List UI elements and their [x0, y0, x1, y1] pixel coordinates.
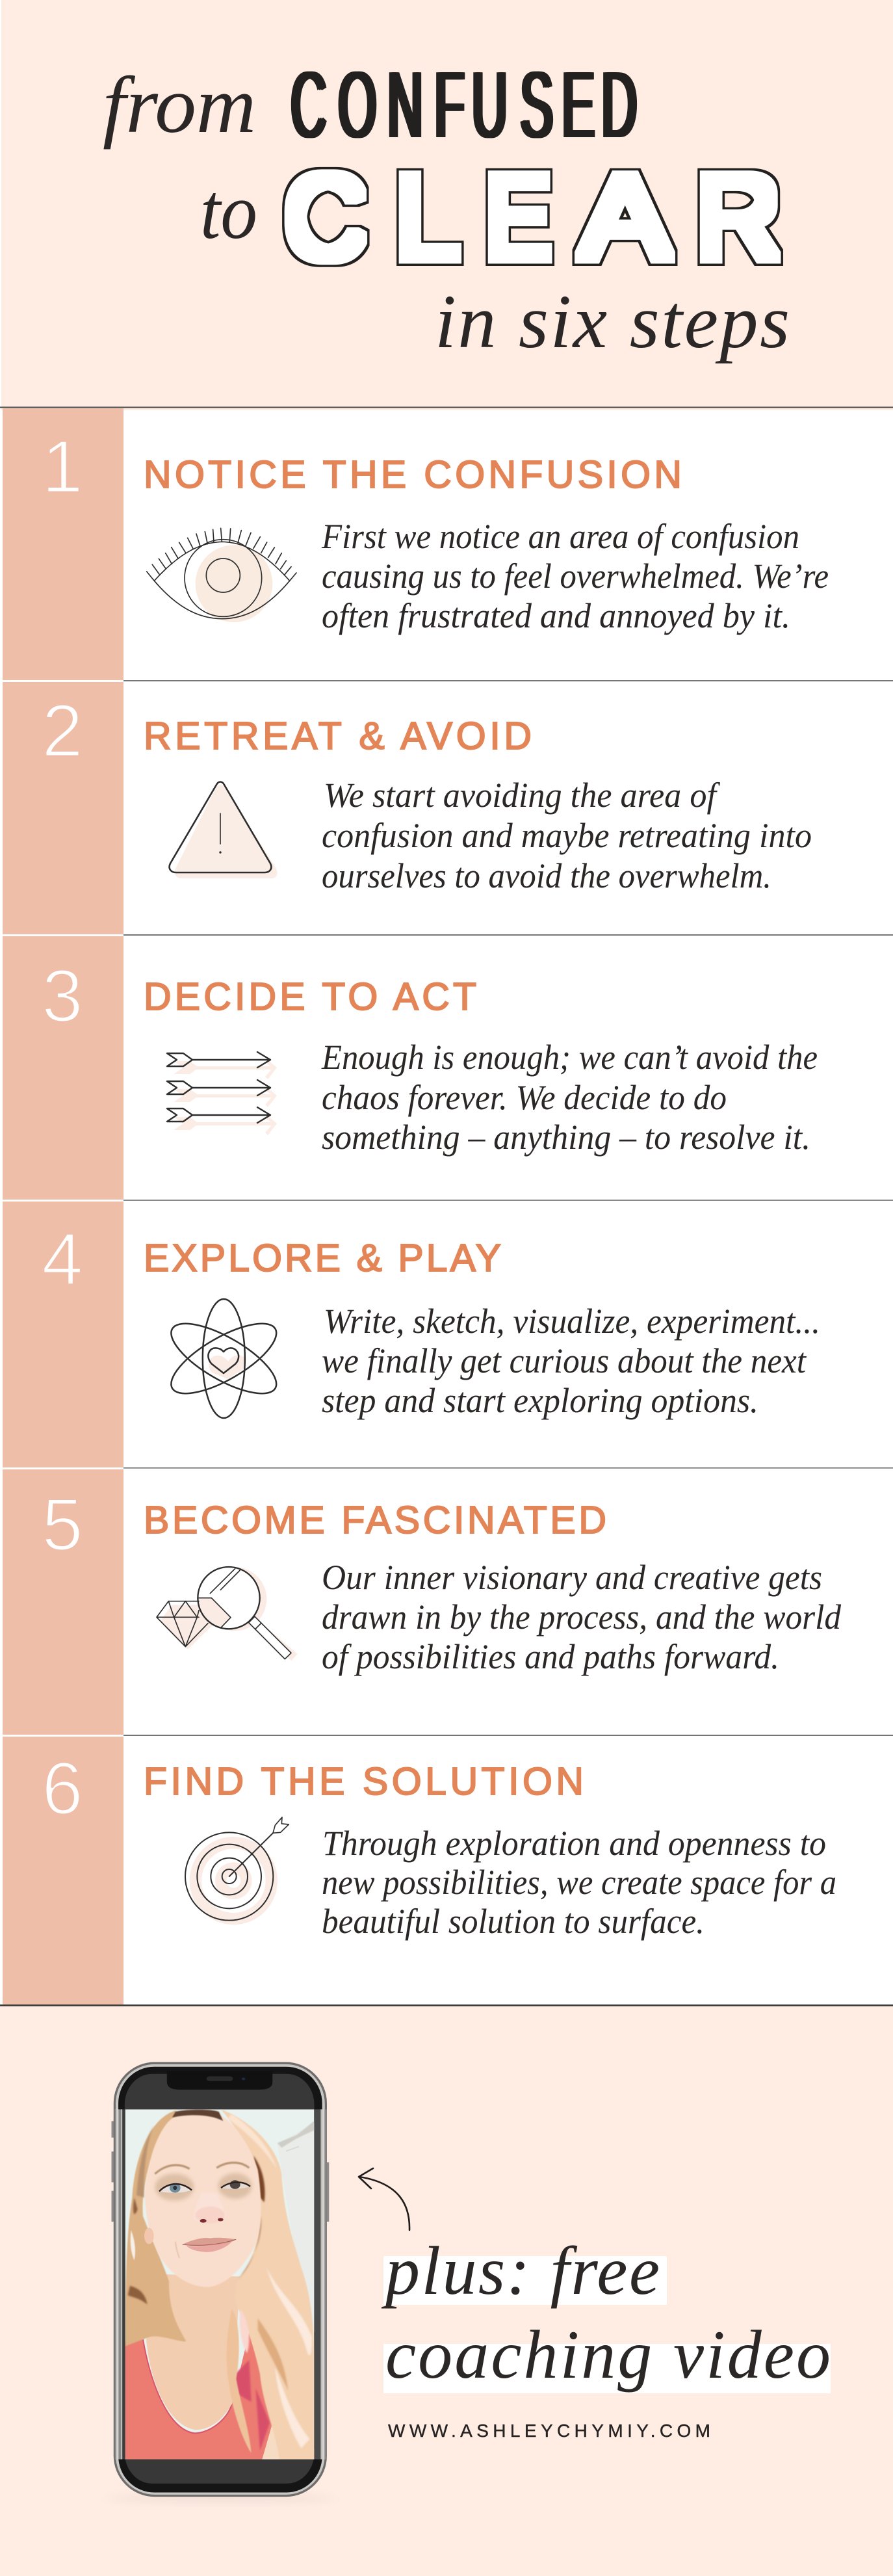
- step number 4: 4: [42, 1218, 83, 1301]
- icon: warning triangle: [170, 782, 278, 878]
- phone with photo: [105, 2062, 337, 2502]
- text block step 1: often frustrated and annoyed by it.: [322, 596, 790, 635]
- text block step 5: drawn in by the process, and the world: [322, 1597, 842, 1636]
- panel: step 1 notice the confusion: [3, 408, 829, 680]
- heading step 4: EXPLORE & PLAY: [144, 1237, 501, 1280]
- title word: CLEAR outlined: A: [580, 151, 670, 283]
- title line: in six steps: in six steps: [435, 279, 790, 364]
- callout: plus free coaching video: coaching video: [385, 2317, 831, 2393]
- title line: to: to: [200, 168, 257, 256]
- title word: CLEAR outlined: R: [696, 151, 781, 283]
- panel: title header: [1, 0, 893, 410]
- text block step 2: confusion and maybe retreating into: [322, 816, 812, 855]
- step number 6: 6: [42, 1748, 83, 1830]
- icon: target with arrow: [185, 1817, 289, 1925]
- text block step 1: causing us to feel overwhelmed. We’re: [322, 557, 829, 596]
- panel: step 5 become fascinated: [3, 1469, 842, 1735]
- text block step 2: ourselves to avoid the overwhelm.: [322, 856, 771, 895]
- text block step 6: beautiful solution to surface.: [322, 1902, 705, 1941]
- arrow: curved pointing to phone: [359, 2168, 409, 2230]
- phone body: [105, 2062, 337, 2502]
- title word: CLEAR outlined: E: [486, 151, 550, 283]
- step number 2: 2: [42, 690, 83, 772]
- title word: CONFUSED: N: [385, 52, 421, 157]
- step number 5: 5: [42, 1484, 83, 1566]
- text block step 5: of possibilities and paths forward.: [322, 1637, 779, 1676]
- text block step 4: Write, sketch, visualize, experiment...: [324, 1302, 820, 1341]
- title word: CLEAR outlined: [285, 151, 781, 283]
- icon: eye: [147, 528, 296, 622]
- step number 3: 3: [42, 955, 83, 1038]
- panel: step 3 decide to act: [3, 936, 818, 1200]
- title word: CLEAR outlined: C: [285, 151, 366, 283]
- title word: CLEAR outlined: L: [395, 151, 459, 283]
- panel: step 2 retreat and avoid: [3, 682, 812, 934]
- text block step 6: new possibilities, we create space for a: [322, 1863, 836, 1902]
- website url: WWW.ASHLEYCHYMIY.COM: [388, 2421, 710, 2441]
- text block step 3: something – anything – to resolve it.: [322, 1118, 810, 1157]
- heading step 6: FIND THE SOLUTION: [144, 1760, 584, 1803]
- panel: step 6 find the solution: [3, 1737, 836, 2004]
- step number 1: 1: [42, 426, 83, 508]
- title word: CONFUSED: D: [599, 52, 634, 157]
- title word: CONFUSED: S: [518, 52, 550, 157]
- icon: atom with heart: [162, 1299, 286, 1418]
- text block step 3: [321, 1038, 818, 1157]
- text block step 2: [322, 776, 812, 895]
- text block step 1: First we notice an area of confusion: [321, 517, 799, 556]
- text block step 5: [322, 1558, 842, 1676]
- text block step 2: We start avoiding the area of: [324, 776, 721, 815]
- title word: CONFUSED: E: [560, 52, 592, 157]
- title word: CONFUSED: F: [432, 52, 462, 157]
- callout: plus free coaching video: [381, 2233, 831, 2393]
- callout: plus free coaching video: plus: free: [381, 2233, 660, 2309]
- title word: CONFUSED: U: [469, 52, 505, 157]
- heading step 2: RETREAT & AVOID: [144, 715, 532, 757]
- text block step 3: Enough is enough; we can’t avoid the: [321, 1038, 818, 1077]
- heading step 3: DECIDE TO ACT: [144, 975, 476, 1018]
- text block step 4: step and start exploring options.: [322, 1381, 758, 1420]
- title word: CONFUSED: C: [289, 52, 324, 157]
- text block step 4: we finally get curious about the next: [322, 1341, 807, 1380]
- text block step 5: Our inner visionary and creative gets: [322, 1558, 822, 1597]
- text block step 6: [322, 1824, 836, 1941]
- photo: smiling woman: [115, 2109, 327, 2459]
- panel: coaching video footer: [0, 2004, 893, 2576]
- title line: from: from: [103, 60, 256, 150]
- title word: CONFUSED: [289, 52, 637, 157]
- heading step 5: BECOME FASCINATED: [144, 1499, 606, 1542]
- icon: three arrows: [167, 1052, 277, 1135]
- title word: CONFUSED: O: [336, 52, 374, 157]
- panel: step 4 explore and play: [3, 1202, 820, 1467]
- heading step 1: NOTICE THE CONFUSION: [144, 453, 682, 496]
- text block step 1: [321, 517, 829, 635]
- text block step 4: [322, 1302, 820, 1420]
- text block step 3: chaos forever. We decide to do: [322, 1078, 727, 1117]
- text block step 6: Through exploration and openness to: [322, 1824, 826, 1863]
- icon: magnifying glass over diamond: [157, 1567, 298, 1661]
